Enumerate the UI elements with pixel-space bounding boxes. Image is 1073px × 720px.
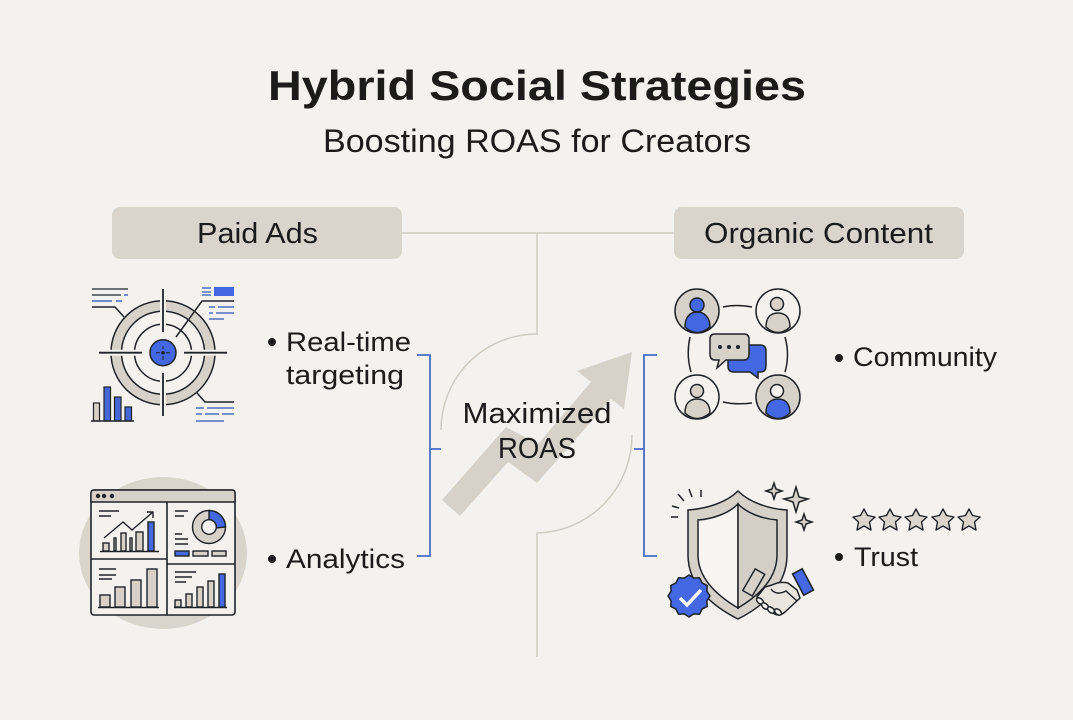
title: Hybrid Social Strategies [268, 62, 806, 109]
center label: Maximized [462, 398, 612, 430]
heading: Organic Content: Organic Content [704, 218, 933, 250]
center label line 2: ROAS [498, 433, 576, 465]
bullet: Trust: Trust [854, 542, 919, 572]
heading: Organic Content [674, 207, 964, 259]
bullet: Real-time targeting: Real-time [286, 327, 411, 357]
bullet: Analytics: Analytics [286, 544, 405, 574]
subtitle: Boosting ROAS for Creators [323, 123, 751, 159]
bullet: Real-time targeting: targeting [286, 360, 404, 390]
bullet: Real-time targeting [268, 327, 411, 390]
arrow: maximized ROAS [442, 352, 632, 516]
bullet: Community: Community [853, 342, 998, 372]
rating stars [853, 509, 980, 530]
heading: Paid Ads [112, 207, 402, 259]
icon: community [675, 289, 800, 419]
left bracket [417, 355, 441, 556]
icon: analytics dashboard [79, 477, 247, 629]
right bracket [634, 355, 657, 556]
icon: target [91, 287, 234, 421]
connector lines [402, 233, 674, 657]
icon: trust shield [668, 483, 813, 619]
heading: Paid Ads: Paid Ads [197, 218, 318, 250]
